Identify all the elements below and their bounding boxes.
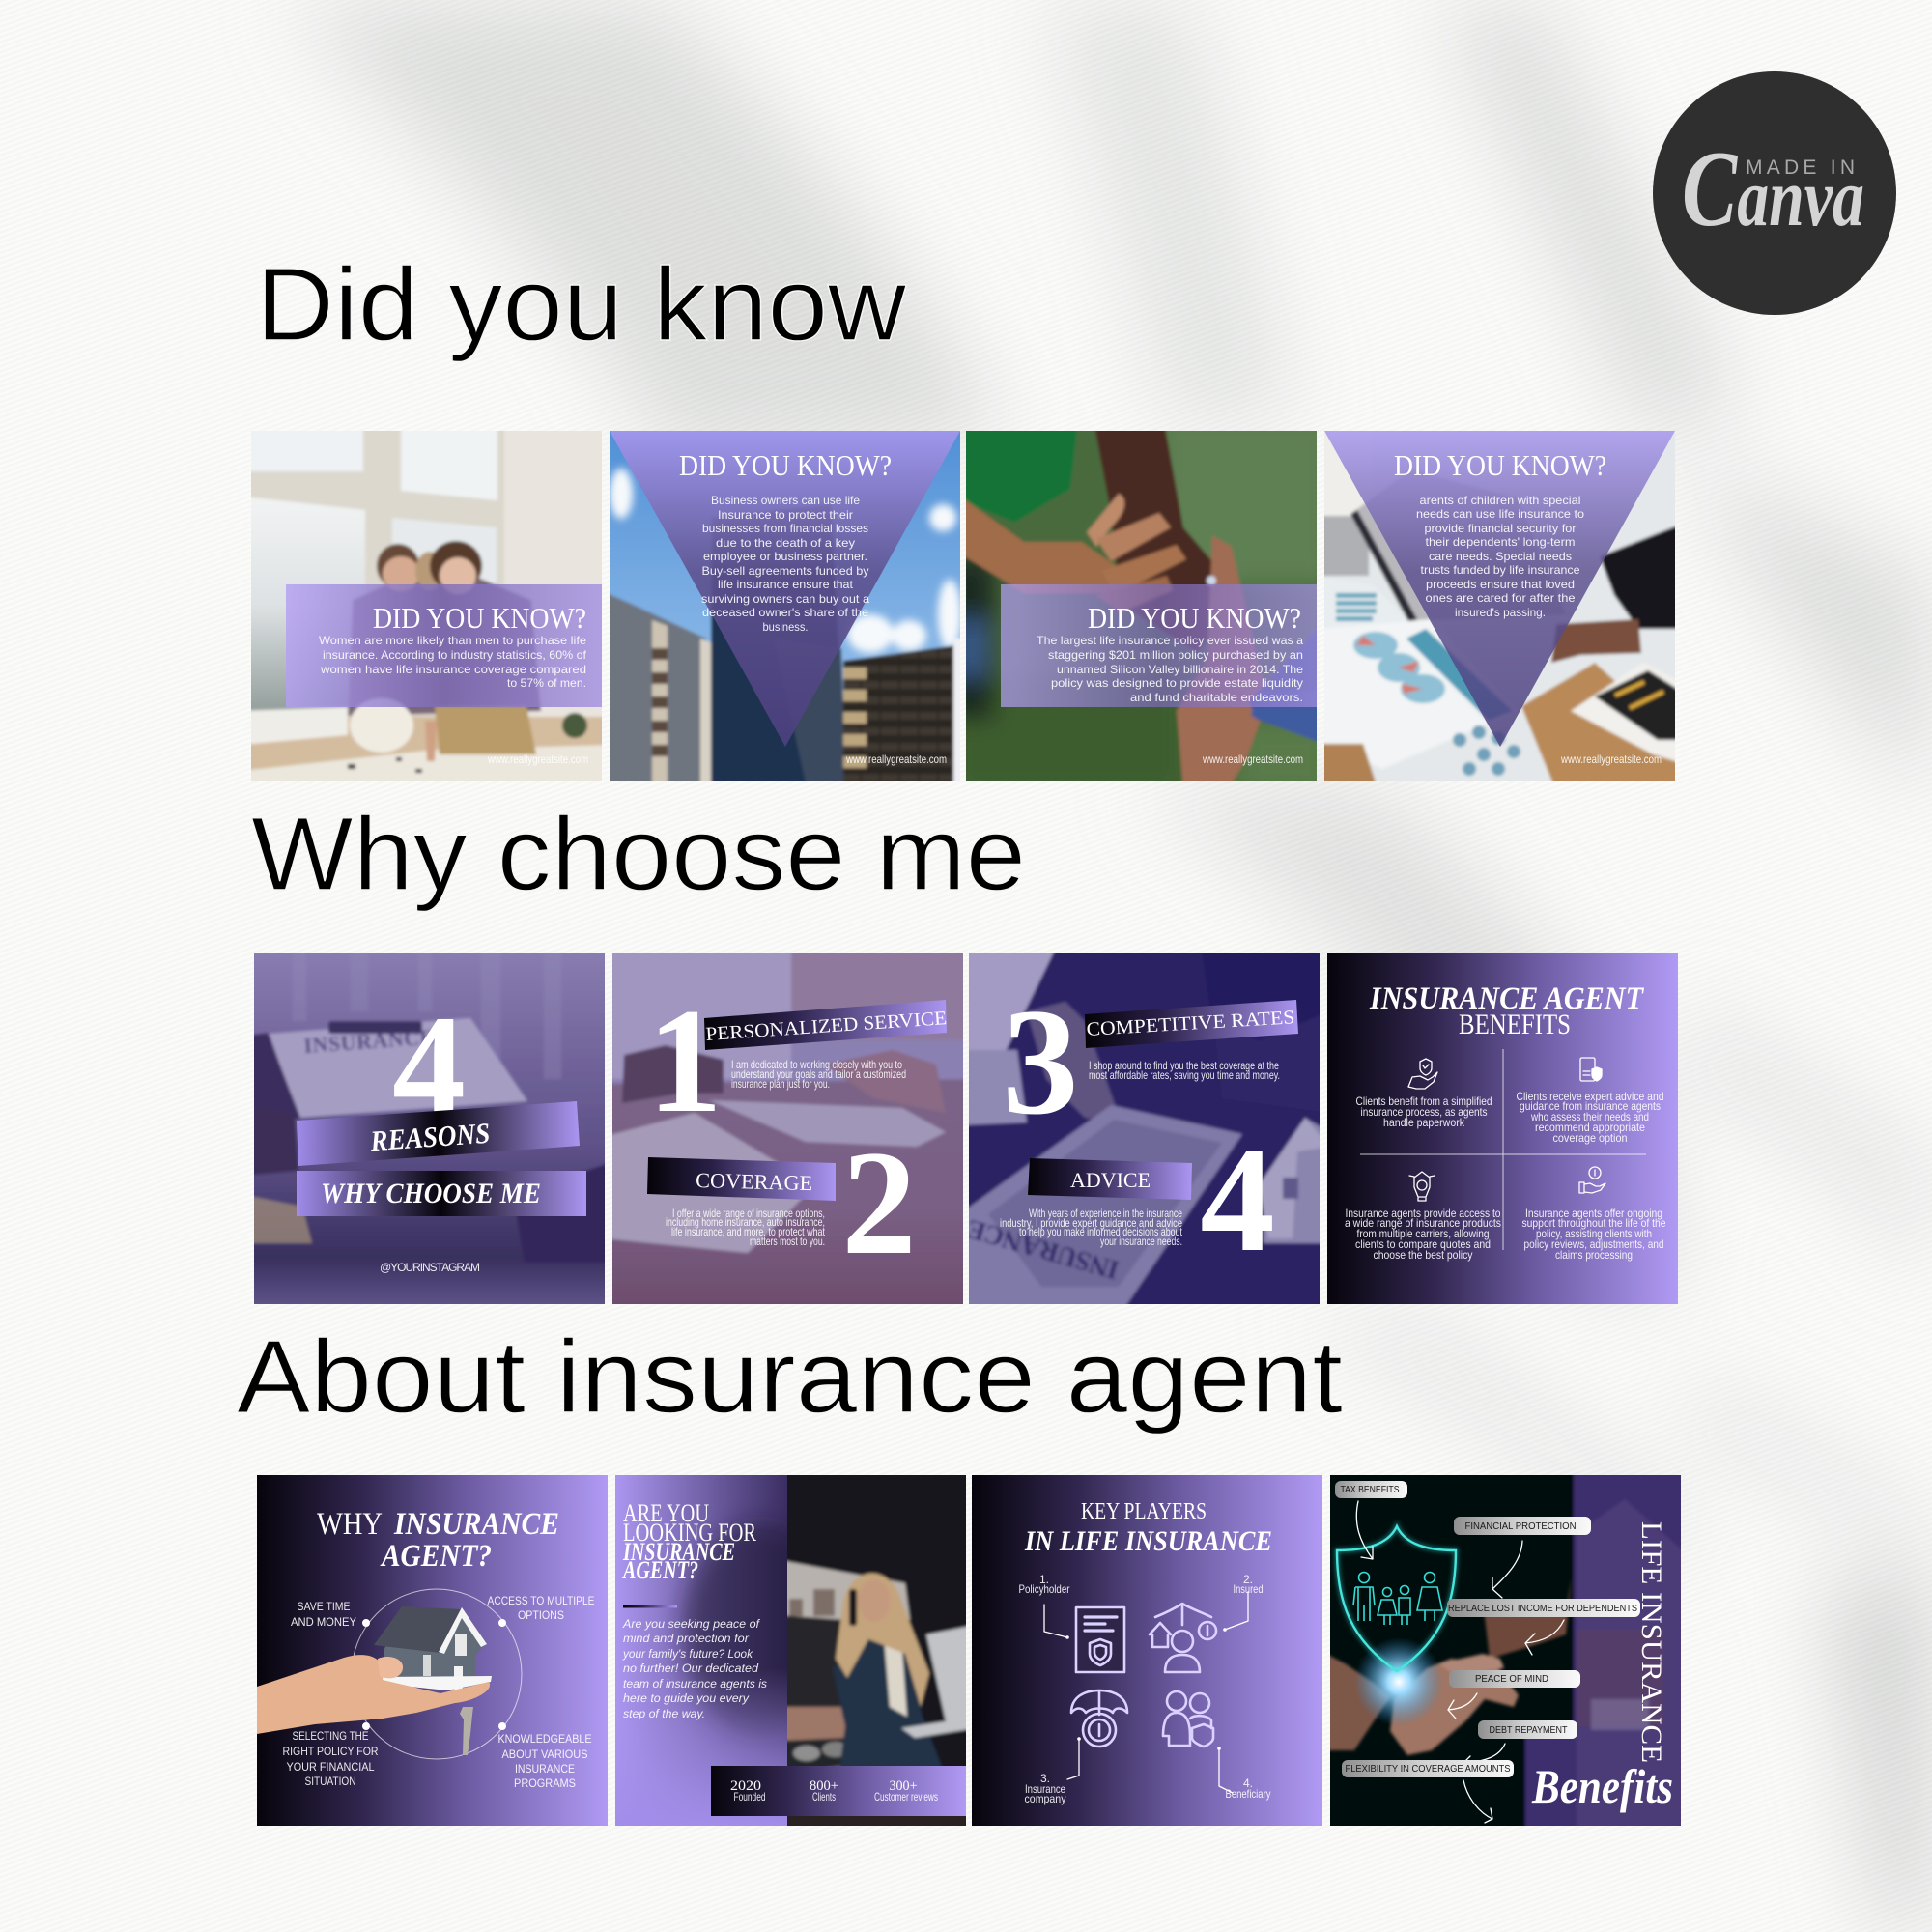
photo: clipboard, tinted: INSURANCE: [303, 1025, 435, 1058]
benefit text bottom right: support throughout the life of the: [1522, 1216, 1666, 1230]
body text: coverage: I offer a wide range of insurance options,: [672, 1207, 825, 1220]
card: life insurance benefits: [1321, 1465, 1690, 1835]
icon: hand with shield check: [1408, 1059, 1437, 1089]
pill: debt repayment: [1478, 1720, 1577, 1739]
ribbon: reasons: [297, 1101, 580, 1166]
label: beneficiary: Beneficiary: [1225, 1787, 1271, 1801]
pill: debt repayment: DEBT REPAYMENT: [1490, 1725, 1567, 1736]
benefit text top left: Clients benefit from a simplified: [1356, 1094, 1492, 1108]
card: did you know, family: [251, 431, 602, 781]
vertical title: life insurance: LIFE INSURANCE: [1635, 1521, 1667, 1763]
stats bar: [711, 1766, 966, 1816]
label: insurance company: [1024, 1737, 1081, 1805]
body text: advice: your insurance needs.: [1100, 1235, 1182, 1248]
glow at palms: [1354, 1637, 1443, 1726]
number 3: 3: [1003, 978, 1078, 1147]
image: hand holding house and key: [257, 1606, 492, 1755]
label: knowledgeable: KNOWLEDGEABLE: [498, 1732, 591, 1746]
body text: [319, 634, 587, 690]
card: did you know, buildings: [610, 431, 960, 781]
card: did you know, charts: [1315, 421, 1685, 791]
card: reasons 1 and 2: [603, 944, 973, 1314]
ribbon: personalized service: PERSONALIZED SERVICE: [705, 1008, 948, 1045]
benefit text bottom left: from multiple carriers, allowing: [1356, 1227, 1490, 1240]
body text: advice: With years of experience in the insurance: [1029, 1207, 1182, 1220]
photo: charts on desk: [1315, 421, 1685, 791]
pill: tax benefits: [1335, 1481, 1407, 1498]
pill: flexibility: [1342, 1760, 1514, 1777]
icon: hand with dollar coin: [1579, 1167, 1605, 1193]
heading: WHY: [317, 1507, 383, 1542]
benefit text bottom right: policy, assisting clients with: [1536, 1227, 1652, 1240]
label: save time and money: AND MONEY: [291, 1615, 356, 1629]
heading: [1369, 981, 1645, 1040]
icon: glowing shield: [1337, 1526, 1456, 1671]
ribbon: reasons: REASONS: [368, 1118, 491, 1157]
label: knowledgeable: ABOUT VARIOUS: [502, 1747, 587, 1761]
ribbon: why choose me: [297, 1171, 586, 1216]
body text: due to the death of a key: [716, 536, 855, 550]
heading: DID YOU KNOW?: [1088, 601, 1301, 635]
circle diagram with dots: [352, 1589, 522, 1759]
body text: women have life insurance coverage compared: [320, 663, 586, 676]
label: save time and money: [291, 1600, 356, 1629]
photo: contract signing, tinted: INSURANCE: [964, 1213, 1122, 1285]
photo: office towers: [610, 431, 960, 781]
heading: BENEFITS: [1459, 1009, 1571, 1040]
heading: [621, 1499, 757, 1584]
card: key players in life insurance: [972, 1475, 1322, 1826]
stat: customer reviews: [874, 1778, 938, 1804]
website: www.reallygreatsite.com: [845, 753, 947, 766]
ribbon: advice: [1028, 1158, 1192, 1200]
photo: family by window: [251, 431, 602, 781]
photo: signing, tinted: [603, 944, 973, 1314]
gradient panel: [615, 1475, 838, 1826]
body text: business.: [763, 620, 808, 634]
pill: tax benefits: TAX BENEFITS: [1341, 1485, 1400, 1495]
purple overlay panel: [1001, 584, 1317, 707]
benefit text top right: Clients receive expert advice and: [1517, 1090, 1663, 1103]
label: selecting the right policy: RIGHT POLICY FOR: [282, 1745, 379, 1758]
body text: needs can use life insurance to: [1416, 507, 1584, 521]
benefit text bottom left: [1345, 1207, 1501, 1262]
label: selecting the right policy: [282, 1729, 379, 1788]
heading: INSURANCE AGENT: [1369, 981, 1645, 1016]
card: insurance agent benefits: [1327, 953, 1678, 1304]
body text: personalized service: I am dedicated to working closely with you to: [731, 1058, 902, 1071]
card: did you know, hands: [966, 431, 1317, 781]
ribbon: competitive rates: COMPETITIVE RATES: [1086, 1007, 1295, 1040]
card: are you looking for insurance agent: [615, 1465, 976, 1835]
heading: KEY PLAYERS: [1081, 1499, 1207, 1524]
icon: umbrella over coin: [1071, 1690, 1127, 1747]
heading: Why choose me: Why choose me: [251, 795, 1026, 912]
purple overlay panel: [286, 584, 602, 707]
label: knowledgeable: INSURANCE: [515, 1762, 575, 1776]
body text: arents of children with special: [1420, 494, 1580, 507]
label: knowledgeable: [498, 1732, 591, 1790]
benefit text top right: recommend appropriate: [1535, 1121, 1645, 1134]
body text: policy was designed to provide estate liquidity: [1051, 676, 1303, 690]
icon: policy document: [1076, 1607, 1124, 1672]
paragraph: step of the way.: [623, 1707, 705, 1720]
body text: The largest life insurance policy ever issued was a: [1037, 634, 1303, 647]
label: selecting the right policy: SITUATION: [305, 1775, 355, 1788]
heading: DID YOU KNOW?: [1394, 448, 1606, 482]
paragraph: [622, 1617, 767, 1720]
label: beneficiary: [1217, 1747, 1271, 1801]
benefit text top right: [1517, 1090, 1663, 1145]
label: policyholder: 1.: [1039, 1573, 1049, 1586]
badge: Made in Canva: [1653, 71, 1896, 315]
label: policyholder: [1018, 1573, 1070, 1639]
photo: joined hands: [966, 431, 1317, 781]
quadrant cross lines: [1360, 1049, 1646, 1250]
benefit text bottom right: Insurance agents offer ongoing: [1525, 1207, 1662, 1220]
body text: coverage: including home insurance, auto insurance,: [666, 1215, 825, 1229]
paragraph: Are you seeking peace of: [622, 1617, 761, 1631]
benefit text top right: coverage option: [1553, 1131, 1627, 1145]
benefit text bottom right: policy reviews, adjustments, and: [1524, 1237, 1663, 1251]
icon: beneficiaries couple: [1163, 1691, 1213, 1747]
body text: and fund charitable endeavors.: [1130, 691, 1303, 704]
divider rule: [623, 1605, 677, 1607]
ribbon: coverage: [647, 1157, 836, 1201]
stat: founded: 2020: [730, 1778, 761, 1794]
label: insurance company: company: [1024, 1792, 1066, 1805]
website: www.reallygreatsite.com: [1202, 753, 1303, 766]
photo: contract signing, tinted: [959, 944, 1329, 1314]
body text: staggering $201 million policy purchased by an: [1048, 648, 1303, 662]
body text: personalized service: insurance plan just for you.: [731, 1077, 830, 1091]
photo: clipboard, tinted: [244, 944, 614, 1314]
gradient panel: [972, 1475, 1322, 1826]
heading: AGENT?: [621, 1556, 698, 1584]
purple triangle: [610, 431, 960, 747]
number 4: 4: [1200, 1117, 1275, 1283]
pill: replace lost income: [1447, 1599, 1640, 1617]
body text: proceeds ensure that loved: [1426, 578, 1575, 591]
body text: to 57% of men.: [507, 676, 586, 690]
body text: provide financial security for: [1424, 522, 1577, 535]
heading: Did you know: Did you know: [256, 245, 907, 362]
benefit text bottom left: a wide range of insurance products: [1345, 1216, 1501, 1230]
label: policyholder: Policyholder: [1018, 1582, 1070, 1596]
heading: AGENT?: [380, 1539, 492, 1574]
number 1: 1: [647, 978, 723, 1144]
heading: IN LIFE INSURANCE: [1024, 1525, 1272, 1557]
heading: LOOKING FOR: [623, 1519, 757, 1547]
stat: clients: 800+: [810, 1778, 838, 1794]
paragraph: no further! Our dedicated: [623, 1662, 758, 1675]
label: insured: 2.: [1243, 1573, 1253, 1586]
body text: their dependents' long-term: [1426, 535, 1575, 549]
ribbon: coverage: COVERAGE: [696, 1168, 812, 1195]
body text: personalized service: understand your goals and tailor a customized: [731, 1067, 906, 1081]
body text: advice: [1000, 1207, 1182, 1248]
gradient panel: [1327, 953, 1678, 1304]
body text: Insurance to protect their: [718, 508, 853, 522]
benefit text bottom left: clients to compare quotes and: [1355, 1237, 1491, 1251]
benefit text top left: [1356, 1094, 1492, 1129]
benefit text bottom right: [1522, 1207, 1666, 1262]
benefit text top right: who assess their needs and: [1530, 1110, 1649, 1123]
heading: DID YOU KNOW?: [373, 601, 586, 635]
paragraph: your family's future? Look: [622, 1647, 753, 1661]
label: insured: Insured: [1233, 1582, 1264, 1596]
label: selecting the right policy: YOUR FINANCIAL: [286, 1760, 375, 1774]
card: 4 reasons: [244, 944, 614, 1314]
pill: peace of mind: PEACE OF MIND: [1475, 1674, 1548, 1685]
body text: personalized service: [731, 1058, 906, 1091]
stat: clients: Clients: [812, 1790, 836, 1804]
label: insurance company: Insurance: [1025, 1782, 1065, 1796]
arrows between pills: [1356, 1501, 1564, 1823]
stat: founded: Founded: [734, 1790, 765, 1804]
icon: family figures: [1353, 1573, 1442, 1625]
pill: replace lost income: REPLACE LOST INCOME FOR DEPENDENTS: [1448, 1604, 1637, 1614]
benefit text bottom left: choose the best policy: [1374, 1248, 1472, 1262]
label: access to multiple options: [487, 1594, 595, 1622]
body text: competitive rates: [1089, 1059, 1280, 1082]
body text: coverage: matters most to you.: [750, 1235, 825, 1248]
stat: founded: [730, 1778, 765, 1804]
label: insured: [1223, 1573, 1264, 1632]
heading: [317, 1507, 559, 1574]
photo backgrounds: [1321, 1465, 1690, 1835]
purple triangle: [1324, 431, 1675, 747]
label: access to multiple options: OPTIONS: [518, 1608, 564, 1622]
body text: competitive rates: most affordable rates, saving you time and money.: [1089, 1068, 1280, 1082]
heading: About insurance agent: About insurance agent: [237, 1318, 1343, 1435]
badge: Made in Canva: MADE IN: [1746, 156, 1855, 179]
paragraph: here to guide you every: [623, 1691, 750, 1705]
body text: businesses from financial losses: [702, 522, 868, 535]
paragraph: mind and protection for: [623, 1632, 750, 1645]
body text: insurance. According to industry statistics, 60% of: [323, 648, 587, 662]
label: selecting the right policy: SELECTING THE: [292, 1729, 369, 1743]
body text: surviving owners can buy out a: [701, 592, 869, 606]
body text: [701, 494, 869, 634]
label: access to multiple options: ACCESS TO MULTIPLE: [487, 1594, 595, 1607]
benefit text bottom right: claims processing: [1555, 1248, 1633, 1262]
body text: deceased owner's share of the: [702, 606, 868, 619]
website: www.reallygreatsite.com: [487, 753, 588, 766]
body text: advice: to help you make informed decisions about: [1019, 1225, 1182, 1238]
script title: benefits: Benefits: [1531, 1759, 1673, 1813]
ribbon: competitive rates: [1085, 1000, 1298, 1048]
body text: Women are more likely than men to purchase life: [319, 634, 586, 647]
body text: advice: industry, I provide expert guidance and advice: [1000, 1216, 1182, 1230]
number 4: 4: [392, 985, 466, 1148]
photo: cupped hands: [1321, 1577, 1572, 1755]
label: save time and money: SAVE TIME: [298, 1600, 350, 1613]
paragraph: team of insurance agents is: [623, 1677, 767, 1690]
body text: trusts funded by life insurance: [1420, 563, 1580, 577]
body text: competitive rates: I shop around to find you the best coverage at the: [1089, 1059, 1279, 1072]
number 2: 2: [841, 1120, 917, 1286]
photo: woman on phone in car: [787, 1475, 966, 1826]
body text: insured's passing.: [1455, 606, 1546, 619]
body text: ones are cared for after the: [1426, 591, 1576, 605]
instagram handle: @YOURINSTAGRAM: [380, 1261, 480, 1274]
icon: agent with options: [1409, 1172, 1435, 1201]
body text: employee or business partner.: [703, 550, 867, 563]
body text: Buy-sell agreements funded by: [701, 564, 869, 578]
stat: customer reviews: Customer reviews: [874, 1790, 938, 1804]
body text: care needs. Special needs: [1429, 550, 1572, 563]
pill: peace of mind: [1449, 1670, 1580, 1688]
heading: ARE YOU: [623, 1499, 709, 1527]
card: reasons 3 and 4: [959, 944, 1329, 1314]
card: why insurance agent: [257, 1475, 608, 1826]
body text: coverage: [666, 1207, 825, 1248]
website: www.reallygreatsite.com: [1560, 753, 1662, 766]
benefit text top left: insurance process, as agents: [1360, 1105, 1488, 1119]
label: knowledgeable: PROGRAMS: [514, 1776, 576, 1790]
pill: financial protection: FINANCIAL PROTECTION: [1464, 1521, 1577, 1532]
label: insurance company: 3.: [1040, 1772, 1050, 1785]
ribbon: why choose me: WHY CHOOSE ME: [321, 1178, 541, 1209]
stat: clients: [810, 1778, 838, 1804]
body text: unnamed Silicon Valley billionaire in 2014. The: [1057, 663, 1303, 676]
gradient panel: [257, 1475, 608, 1826]
heading: INSURANCE: [393, 1507, 559, 1542]
ribbon: advice: ADVICE: [1070, 1168, 1151, 1192]
badge: Made in Canva: Canva: [1682, 129, 1864, 249]
benefit text top right: guidance from insurance agents: [1520, 1099, 1661, 1113]
body text: coverage: life insurance, and more, to protect what: [671, 1225, 825, 1238]
benefit text bottom left: Insurance agents provide access to: [1345, 1207, 1501, 1220]
benefit text top left: handle paperwork: [1383, 1116, 1465, 1129]
body text: life insurance ensure that: [718, 578, 854, 591]
icon: document with shield: [1580, 1058, 1602, 1081]
pill: flexibility: FLEXIBILITY IN COVERAGE AMOUNTS: [1345, 1764, 1511, 1775]
heading: [1024, 1499, 1272, 1557]
ribbon: personalized service: [704, 1000, 948, 1050]
body text: [1037, 634, 1303, 704]
heading: INSURANCE: [622, 1538, 735, 1566]
icon: insured person with house and coin: [1150, 1604, 1216, 1672]
label: beneficiary: 4.: [1243, 1776, 1253, 1790]
heading: DID YOU KNOW?: [679, 448, 892, 482]
pill: financial protection: [1454, 1517, 1591, 1535]
body text: Business owners can use life: [711, 494, 860, 507]
stat: customer reviews: 300+: [889, 1778, 918, 1794]
body text: [1416, 494, 1584, 619]
